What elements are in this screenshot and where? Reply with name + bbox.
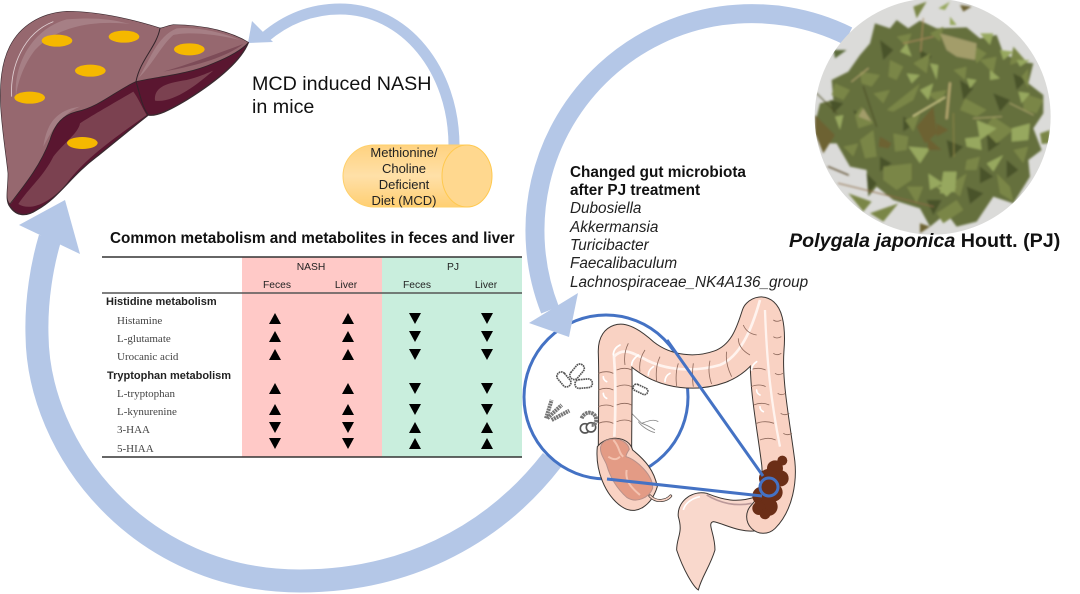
stool	[752, 456, 789, 519]
dark leaves	[830, 40, 1027, 215]
text block: changed gut microbiota: Faecalibaculum	[570, 255, 677, 272]
row labels: 3-HAA	[117, 424, 150, 436]
row labels: Tryptophan metabolism	[107, 370, 231, 382]
magnifier lines and lens	[607, 340, 778, 496]
photo: Polygala japonica herb	[815, 0, 1051, 235]
icon: fatty liver	[1, 12, 248, 215]
row labels: L-tryptophan	[117, 388, 176, 400]
capsule: methionine/choline deficient diet: Diet (MCD)	[372, 193, 436, 208]
haustra	[598, 320, 792, 440]
label: Polygala japonica Houtt. (PJ): Polygala japonica Houtt. (PJ)	[789, 230, 1060, 252]
table: metabolism changes in NASH and PJ	[102, 257, 522, 457]
row labels	[106, 296, 231, 455]
cecum inner lobes	[600, 439, 653, 500]
text block: changed gut microbiota: Lachnospiraceae_NK4A136_group	[570, 274, 809, 291]
capsule: methionine/choline deficient diet: Methionine/	[370, 145, 438, 160]
row labels: Urocanic acid	[117, 351, 179, 363]
bacteria	[546, 362, 658, 433]
text block: changed gut microbiota	[569, 164, 809, 291]
icon: colon	[546, 300, 792, 590]
text block: changed gut microbiota: after PJ treatment	[570, 182, 700, 199]
column headers: PJ	[447, 262, 459, 273]
rectum and sigmoid	[677, 493, 757, 590]
column headers: Liver	[335, 280, 358, 291]
capsule: methionine/choline deficient diet: Deficient	[379, 177, 430, 192]
row labels: Histidine metabolism	[106, 296, 217, 308]
row labels: 5-HIAA	[117, 443, 154, 455]
column headers: Feces	[263, 280, 291, 291]
trend triangles	[269, 313, 493, 449]
arrow: from MCD diet to liver	[248, 9, 454, 146]
capsule: methionine/choline deficient diet: Choline	[382, 161, 426, 176]
column headers	[263, 262, 498, 291]
heading: MCD induced NASH in mice	[252, 73, 431, 118]
text block: changed gut microbiota: Changed gut microbiota	[570, 164, 746, 181]
colon body	[615, 314, 779, 517]
row labels: L-kynurenine	[117, 406, 177, 418]
capsule: methionine/choline deficient diet	[343, 145, 492, 208]
arrow: bottom arc from gut back to liver	[19, 200, 552, 581]
cecum	[597, 438, 657, 510]
row labels: L-glutamate	[117, 333, 171, 345]
twigs	[817, 18, 1033, 207]
column headers: Liver	[475, 280, 498, 291]
text block: changed gut microbiota: Dubosiella	[570, 200, 641, 217]
text block: changed gut microbiota: Turicibacter	[570, 237, 650, 254]
column headers: NASH	[297, 262, 325, 273]
text block: changed gut microbiota: Akkermansia	[569, 219, 658, 236]
column headers: Feces	[403, 280, 431, 291]
heading: MCD induced NASH in mice: MCD induced NASH	[252, 73, 431, 95]
fat deposits	[14, 31, 205, 149]
light leaves	[835, 2, 1030, 197]
heading: table title: Common metabolism and metabolites in feces and liver	[110, 230, 515, 247]
arrow: from PJ herb to gut	[529, 14, 848, 337]
mid olive leaves	[832, 2, 1050, 223]
row labels: Histamine	[117, 315, 162, 327]
brown leaves	[815, 5, 972, 233]
heading: MCD induced NASH in mice: in mice	[252, 96, 314, 118]
magnifier circle: gut microbiota	[524, 315, 688, 479]
